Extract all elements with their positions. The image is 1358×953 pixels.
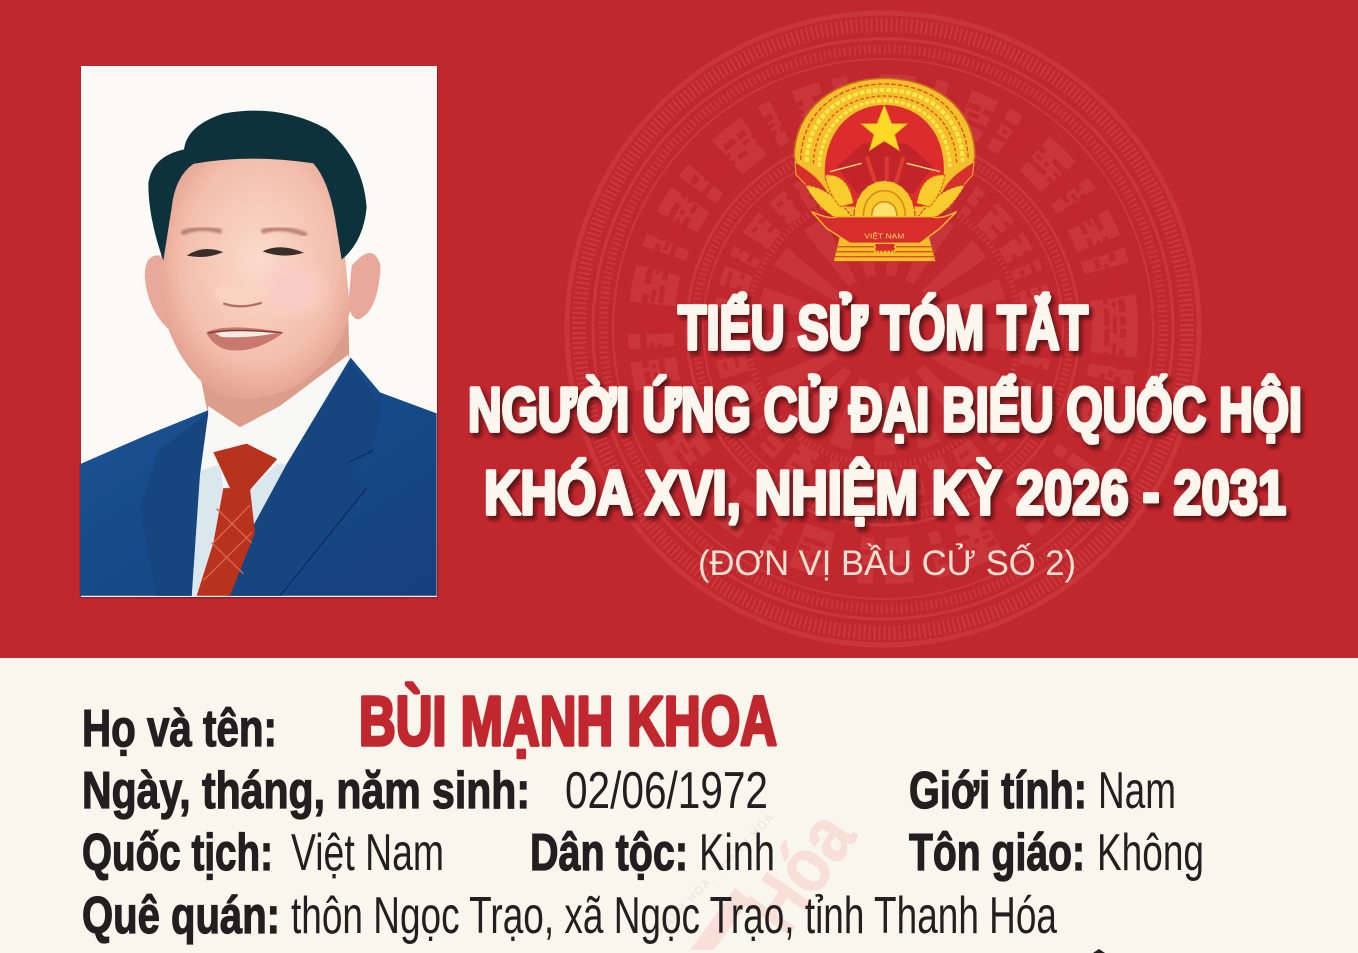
- nationality: Quốc tịch:: [82, 824, 273, 882]
- newspaper watermark: [649, 795, 872, 950]
- red ribbons: [795, 162, 974, 208]
- cogwheel: [854, 181, 915, 217]
- ears: [145, 253, 381, 329]
- panel: cream details background: [0, 658, 1358, 953]
- personal details: [82, 700, 1204, 945]
- hair: [148, 111, 367, 261]
- newspaper watermark: THANH HÓA, THANH HÓA: [649, 811, 777, 942]
- candidate name: BÙI MẠNH KHOA: [359, 682, 777, 760]
- bronze drum watermark: [567, 13, 1199, 645]
- gender: Giới tính:: [909, 762, 1087, 820]
- nationality: Việt Nam: [291, 824, 444, 882]
- title: TIỂU SỬ TÓM TẮT: [678, 294, 1088, 363]
- red field: [825, 105, 944, 207]
- hometown: Quê quán:: [82, 887, 280, 945]
- wheat wreath: [794, 78, 975, 217]
- ethnicity: Dân tộc:: [530, 824, 688, 882]
- suit: [80, 357, 437, 596]
- title: [468, 294, 1302, 528]
- subtitle: (ĐƠN VỊ BẦU CỬ SỐ 2): [698, 543, 1076, 583]
- hometown: thôn Ngọc Trạo, xã Ngọc Trạo, tỉnh Thanh Hóa: [291, 887, 1057, 945]
- shirt: [208, 354, 349, 434]
- nose: [214, 288, 231, 304]
- ethnicity: Kinh: [699, 824, 775, 882]
- religion: Tôn giáo:: [909, 824, 1085, 882]
- portrait photo: [80, 66, 437, 597]
- name ribbon: [812, 212, 957, 243]
- date of birth: Ngày, tháng, năm sinh:: [82, 762, 530, 820]
- mouth: [206, 327, 284, 351]
- eyes and brows: [182, 229, 307, 235]
- neck: [197, 315, 349, 433]
- hometown: [82, 887, 1057, 945]
- newspaper watermark: Hóa: [728, 795, 872, 948]
- national emblem: [794, 78, 975, 262]
- base: [833, 237, 936, 262]
- religion: Không: [1097, 824, 1204, 882]
- star: [861, 105, 908, 151]
- face: [160, 148, 350, 399]
- tie: [197, 444, 277, 596]
- emblem text: VIỆT NAM: [864, 232, 904, 241]
- full name label: Họ và tên:: [82, 700, 277, 758]
- panel: red header background: [0, 0, 1358, 658]
- date of birth: 02/06/1972: [565, 762, 768, 820]
- wheat sprays: [805, 185, 965, 217]
- gender: Nam: [1098, 762, 1176, 820]
